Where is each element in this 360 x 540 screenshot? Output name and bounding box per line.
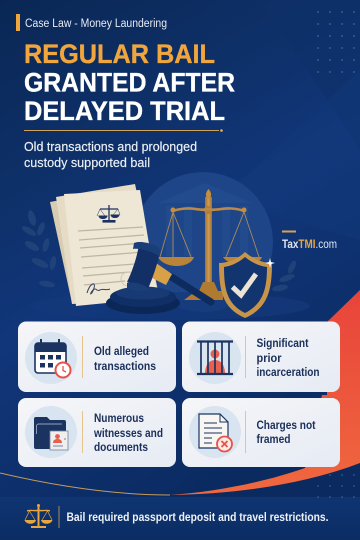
bottom dots — [317, 474, 355, 498]
document stack — [50, 184, 160, 306]
category tag: Case Law - Money Laundering — [25, 18, 167, 30]
document lines — [78, 227, 144, 285]
title: DELAYED TRIAL — [24, 96, 225, 126]
document seal icon — [97, 205, 120, 222]
laurel left — [21, 209, 57, 288]
title: GRANTED AFTER — [24, 68, 235, 98]
label: prior — [256, 351, 282, 365]
label — [256, 418, 316, 446]
category tag — [16, 14, 167, 31]
card: numerous witnesses and documents — [18, 398, 176, 467]
title divider — [24, 129, 223, 132]
shield — [219, 252, 275, 318]
label — [256, 336, 320, 379]
card: old alleged transactions — [18, 322, 176, 392]
label: witnesses and — [93, 426, 163, 440]
label — [94, 344, 156, 373]
label — [93, 411, 163, 454]
title — [24, 39, 235, 126]
scales of justice — [158, 189, 262, 300]
icon: folder — [25, 406, 77, 458]
hero circle backdrop — [133, 172, 273, 312]
card: charges not framed — [182, 398, 340, 467]
brand — [282, 230, 337, 251]
label: documents — [94, 440, 148, 454]
gold curve — [0, 473, 170, 495]
subtitle — [24, 140, 197, 170]
icon: document with x — [189, 406, 241, 458]
label: Old alleged — [94, 344, 149, 358]
gavel — [106, 242, 211, 314]
courthouse silhouette — [158, 183, 252, 256]
footer scales icon — [24, 504, 52, 528]
subtitle: custody supported bail — [24, 156, 150, 170]
brand: TaxTMI.com — [282, 237, 337, 251]
label: transactions — [94, 359, 156, 373]
laurel right — [272, 259, 298, 292]
label: Significant — [256, 336, 308, 350]
dot pattern — [317, 11, 355, 73]
label: Charges not — [256, 418, 316, 432]
subtitle: Old transactions and prolonged — [24, 140, 197, 154]
signature — [87, 284, 110, 294]
footer band — [0, 497, 360, 540]
label: framed — [256, 432, 290, 446]
title: REGULAR BAIL — [24, 39, 215, 69]
hero floor glow — [30, 292, 310, 320]
card: significant prior incarceration — [182, 322, 340, 392]
red swoosh — [170, 290, 360, 495]
icon: prison bars — [189, 332, 241, 384]
label: Numerous — [94, 411, 144, 425]
icon: calendar — [25, 332, 77, 384]
label: incarceration — [256, 365, 320, 379]
